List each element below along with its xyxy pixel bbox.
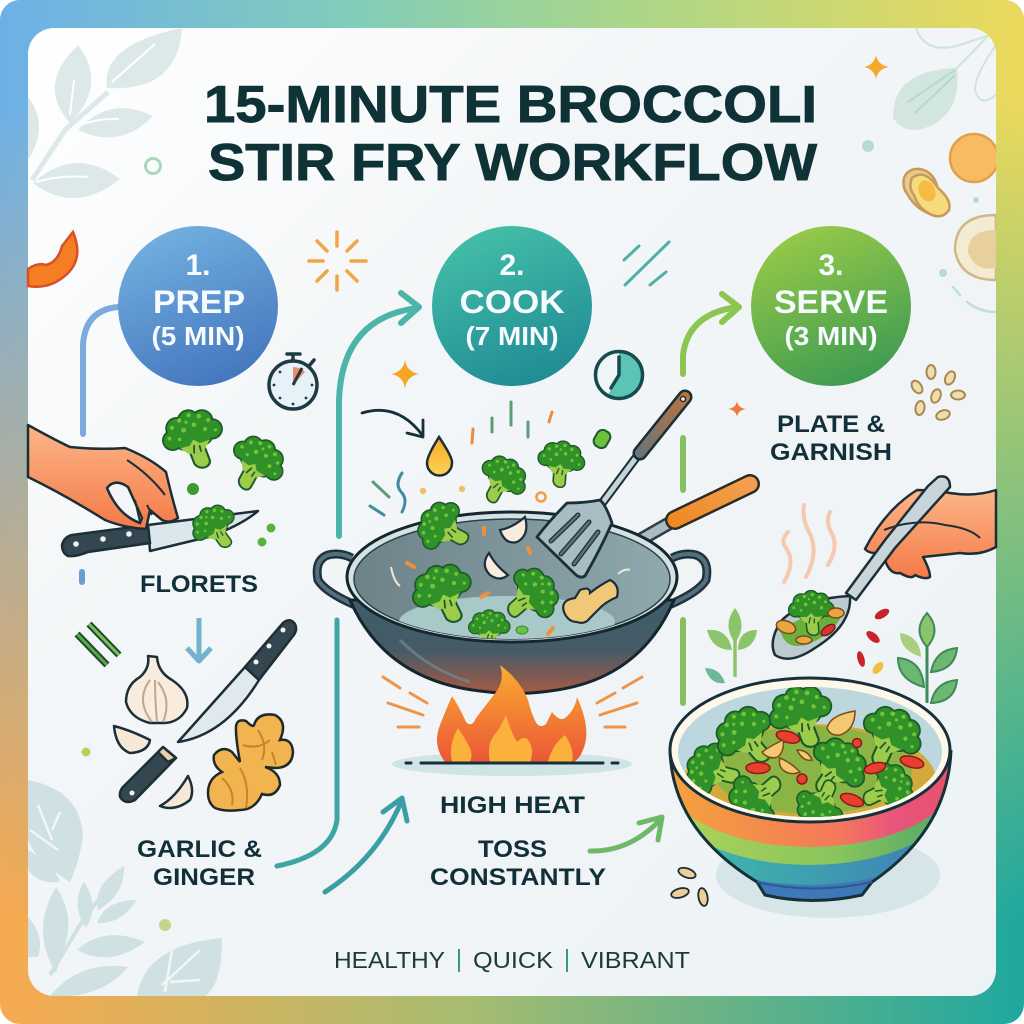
icon: clock: [596, 352, 642, 398]
wok rim: [347, 512, 677, 642]
footer tagline: VIBRANT: [581, 947, 690, 973]
garlic pieces: [500, 517, 526, 542]
hand with spoon: [773, 476, 996, 659]
arrow: teal lower to garlic: [277, 620, 337, 866]
decorative leaves: top right: [893, 28, 996, 130]
bowl rim: [670, 678, 950, 822]
icon: sunburst: [309, 232, 366, 290]
icon: sparkle top right: [864, 55, 889, 79]
label: toss constantly: CONSTANTLY: [430, 864, 606, 891]
step 2 badge: cook: (7 MIN): [466, 321, 558, 351]
arrow: teal to cook: [339, 293, 419, 536]
step 3 badge: serve: (3 MIN): [784, 321, 878, 351]
label: plate and garnish: PLATE &: [777, 411, 885, 438]
bowl interior: [678, 687, 942, 817]
step 2 badge: cook: [432, 226, 592, 386]
step 1 badge: prep: (5 MIN): [152, 321, 244, 351]
arrow: curved small to wok: [362, 410, 423, 437]
heat marks: [383, 677, 642, 727]
icon: spring onion: [77, 624, 119, 665]
hand with knife: florets: [28, 425, 258, 556]
wok interior: [354, 519, 670, 639]
icon: ginger and vegetable slices top right: [904, 134, 998, 312]
icon: seeds: [909, 365, 965, 422]
arrow: blue from prep down: [82, 307, 118, 582]
label: garlic and ginger: GINGER: [153, 864, 255, 891]
wok handles: [317, 554, 355, 605]
title: STIR FRY WORKFLOW: [208, 134, 818, 192]
burner line: [406, 762, 618, 764]
label: high heat: HIGH HEAT: [440, 792, 585, 819]
icon: garnish bits: [856, 607, 891, 676]
step 1 badge: prep: PREP: [153, 284, 245, 320]
icon: broccoli florets: [158, 404, 293, 559]
step 1 badge: prep: 1.: [185, 249, 211, 282]
wok body: [350, 600, 674, 694]
label: plate and garnish: [770, 411, 892, 466]
icon: garlic: [114, 656, 192, 808]
title: 15-MINUTE BROCCOLI: [204, 76, 817, 134]
decorative leaves: top left: [28, 28, 182, 198]
label: florets: FLORETS: [140, 571, 258, 598]
icon: herb sprout left: [705, 608, 757, 683]
arrow: teal up to toss: [325, 798, 407, 892]
label: toss constantly: TOSS: [478, 836, 547, 863]
icon: pepper slice left: [28, 232, 77, 287]
footer tagline: QUICK: [473, 947, 554, 973]
icon: wok: [317, 512, 707, 694]
tossed broccoli: [420, 428, 613, 513]
footer tagline: HEALTHY: [334, 947, 445, 973]
label: plate and garnish: GARNISH: [770, 439, 892, 466]
step 2 badge: cook: COOK: [460, 284, 564, 320]
bowl contents: [685, 687, 935, 817]
bowl shadow: [716, 832, 940, 918]
arrow: green to bowl: [590, 817, 662, 851]
icon: motion slashes: [624, 242, 669, 285]
arrow: down to garlic: [187, 618, 211, 661]
connector: green bars: [680, 438, 686, 703]
burner shadow: [392, 752, 632, 776]
step 3 badge: serve: 3.: [818, 249, 844, 282]
footer tagline: [334, 947, 690, 973]
knife: [62, 511, 258, 556]
icon: chef knife: [120, 620, 296, 802]
arrow: green to serve: [683, 294, 739, 374]
icon: steam: [783, 505, 835, 582]
icon: spatula: [537, 396, 686, 577]
icon: ginger root: [208, 714, 293, 811]
oil drop: [427, 437, 452, 476]
decorative ring and dots near title: [82, 140, 979, 931]
hand: [28, 425, 178, 529]
label: garlic and ginger: GARLIC &: [137, 836, 262, 863]
ginger in wok: [563, 580, 618, 623]
step 1 badge: prep: [118, 226, 278, 386]
icon: herb sprig right: [898, 613, 957, 703]
food in wok: [390, 502, 630, 639]
toss marks: [370, 402, 552, 515]
icon: stopwatch: [269, 354, 317, 409]
label: toss constantly: [430, 836, 606, 891]
decorative leaves: bottom left: [28, 780, 222, 996]
step 2 badge: cook: 2.: [499, 249, 525, 282]
long wok handle: [640, 484, 750, 540]
icon: rainbow bowl: [660, 678, 960, 910]
label: garlic and ginger: [137, 836, 262, 891]
sparkles: [391, 360, 746, 417]
icon: seeds near bowl: [670, 866, 709, 907]
title: [204, 76, 818, 192]
icon: flame: [437, 665, 586, 762]
bowl body bands: [673, 766, 948, 899]
step 3 badge: serve: SERVE: [774, 284, 888, 320]
step 3 badge: serve: [751, 226, 911, 386]
